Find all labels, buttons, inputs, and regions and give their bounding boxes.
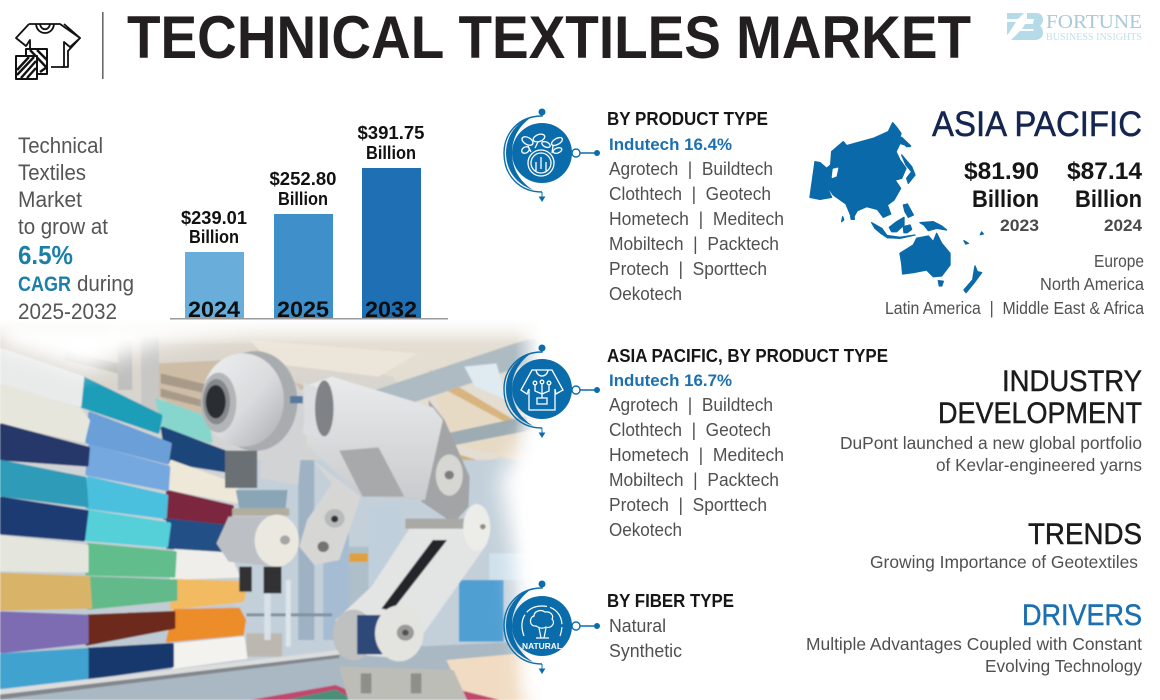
regional values: $81.90 [964,158,1039,185]
drivers: Evolving Technology [985,656,1142,676]
bar chart: market size [170,123,448,322]
text: Asia Pacific by product type: Agrotech | Buildtech [609,395,773,415]
trends [870,518,1142,572]
text: Asia Pacific by product type [607,346,888,540]
bar chart: market size: Billion [278,189,328,209]
text: Asia Pacific by product type: ASIA PACIFIC, BY PRODUCT TYPE [607,346,888,366]
conveyor platform [0,640,560,700]
bar chart: market size: $391.75 [358,123,424,143]
text: by fiber type: BY FIBER TYPE [607,591,734,611]
regional values: Billion [1075,186,1142,213]
bar chart: market size: 2032 [365,297,417,322]
text: by product type: Clothtech | Geotech [609,184,771,204]
trends: Growing Importance of Geotextiles [870,552,1138,572]
text: by product type: Oekotech [609,284,682,304]
growth summary text: 6.5% [18,240,73,270]
text: Asia Pacific by product type: Mobiltech | Packtech [609,470,779,490]
industry development: DuPont launched a new global portfolio [840,433,1142,453]
drivers: Multiple Advantages Coupled with Constant [806,634,1142,654]
drivers [806,599,1142,676]
map: Asia Pacific [810,123,983,293]
fabric column C (rear stack) [157,400,246,667]
text: by product type: Mobiltech | Packtech [609,234,779,254]
industry development [840,365,1142,475]
growth summary text: during [77,271,134,296]
header divider [102,12,104,79]
text: by fiber type: Natural [609,616,666,636]
industry development: DEVELOPMENT [938,397,1142,430]
heading: Asia Pacific: ASIA PACIFIC [932,105,1142,144]
logo: Fortune Business Insights: BUSINESS INSIGHTS [1046,32,1142,43]
regional values: 2023 [1000,216,1039,235]
title: TECHNICAL TEXTILES MARKET [127,4,971,71]
bar chart: market size: Billion [189,227,239,247]
header icon: t-shirt and fabric swatches [16,24,80,79]
fabric column B [81,378,176,678]
other regions list [885,251,1144,318]
industry development: of Kevlar-engineered yarns [936,455,1142,475]
bar chart: market size: $252.80 [270,169,336,189]
factory background [236,460,543,673]
icon: regional product type, shirt circuit badge [504,344,600,437]
icon: fiber type, natural tree badge [504,580,600,673]
regional values: $87.14 [1067,158,1143,185]
text: Asia Pacific by product type: Protech | Sporttech [609,495,767,515]
growth summary text: CAGR [18,273,71,296]
regional values [964,158,1143,235]
text: by fiber type [607,591,734,661]
robotic arm [201,351,490,700]
photo: fabric stacks and robotic arm [0,326,538,700]
trends: TRENDS [1028,518,1142,551]
icon: fiber type, natural tree badge: NATURAL [522,641,562,651]
icon: product type, plant and circuit badge [504,108,600,201]
text: Asia Pacific by product type: Indutech 16.7% [609,371,732,390]
bar chart: market size: Billion [366,143,416,163]
logo: Fortune Business Insights: FORTUNE [1046,11,1142,33]
bar chart: market size: $239.01 [181,208,247,228]
photo fades [0,320,560,700]
logo: Fortune Business Insights [1007,11,1142,43]
text: by product type [607,109,784,304]
other regions list: North America [1040,274,1144,294]
bar chart: market size: 2024 [188,297,241,322]
text: Asia Pacific by product type: Clothtech | Geotech [609,420,771,440]
text: Asia Pacific by product type: Oekotech [609,520,682,540]
text: by product type: BY PRODUCT TYPE [607,109,768,129]
growth summary text: Technical [18,133,103,158]
text: by product type: Agrotech | Buildtech [609,159,773,179]
text: by product type: Protech | Sporttech [609,259,767,279]
growth summary text: Textiles [18,160,86,185]
growth summary text: to grow at [18,214,108,239]
growth summary text: Market [18,187,82,212]
regional values: Billion [972,186,1039,213]
growth summary text [18,133,134,324]
regional values: 2024 [1104,216,1143,235]
text: by fiber type: Synthetic [609,641,682,661]
text: by product type: Hometech | Meditech [609,209,784,229]
growth summary text: 2025-2032 [18,299,117,324]
fabric column A [1,349,91,688]
text: by product type: Indutech 16.4% [609,135,732,154]
text: Asia Pacific by product type: Hometech | Meditech [609,445,784,465]
ceiling and beams [64,320,560,481]
bar chart: market size: 2025 [277,297,329,322]
other regions list: Europe [1094,251,1144,271]
industry development: INDUSTRY [1002,365,1142,398]
drivers: DRIVERS [1022,599,1142,632]
